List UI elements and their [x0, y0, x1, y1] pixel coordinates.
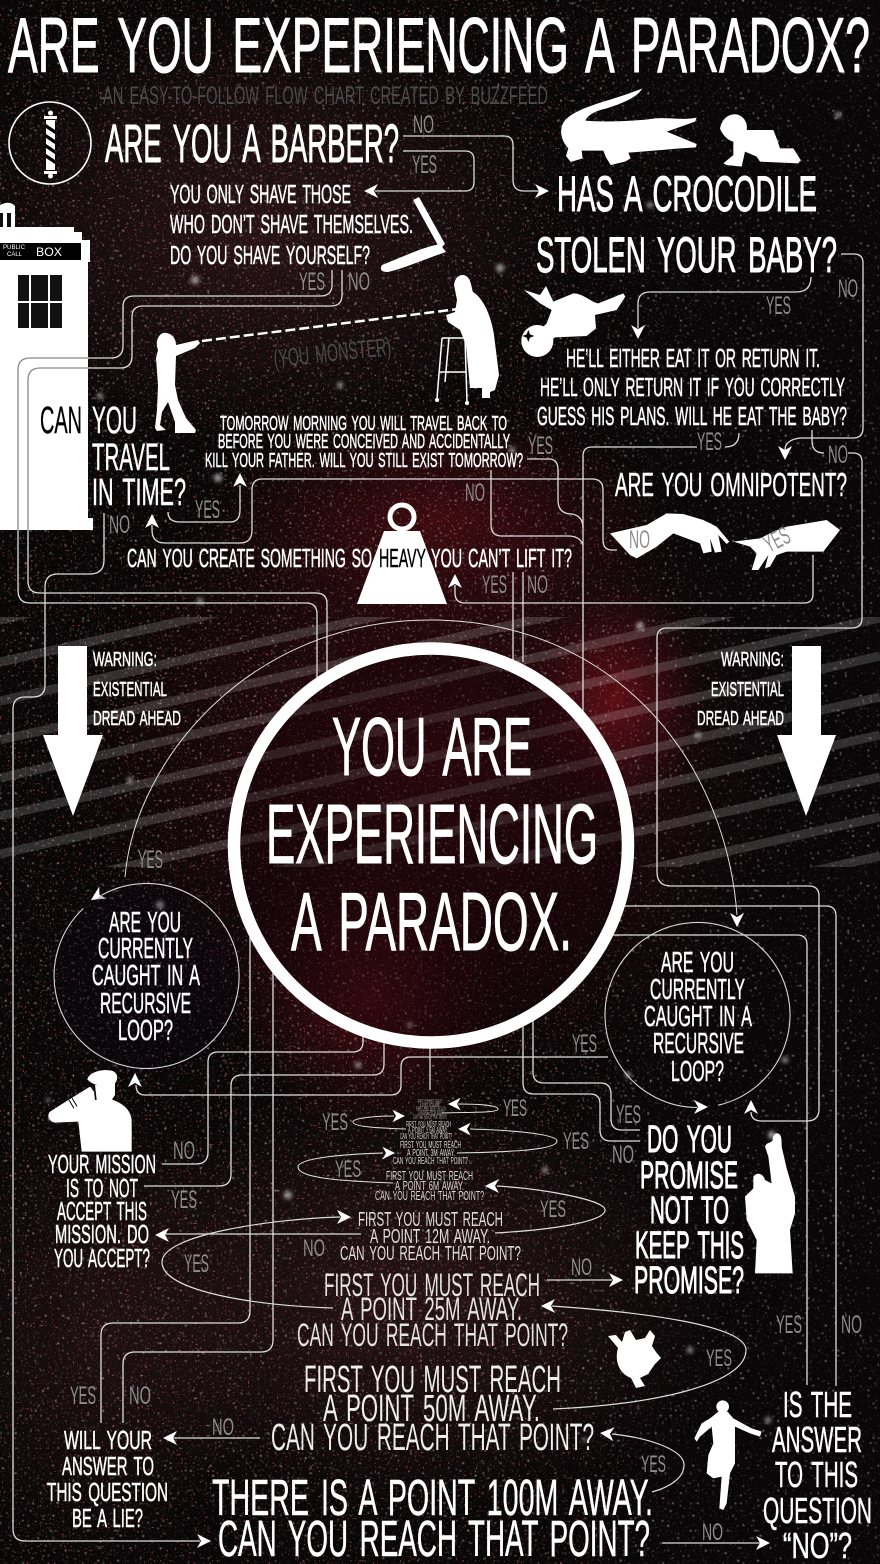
labels: yes and no in the stack: [212, 1095, 732, 1546]
text: recursive loop question: RECURSIVE: [100, 988, 191, 1020]
panel: left recursive loop: [54, 846, 239, 1068]
text: your mission: YOUR MISSION: [48, 1149, 156, 1179]
icon: saluting soldier: [48, 1070, 132, 1152]
text: you travel in time: TRAVEL: [92, 437, 170, 479]
text: YES: [184, 1250, 209, 1278]
text: warning existential dread: WARNING:: [93, 649, 157, 671]
icon: shooter silhouette: [155, 333, 200, 433]
icon: razor: [381, 197, 446, 272]
text: will your answer: [47, 1425, 168, 1533]
text: will your answer: ANSWER TO: [62, 1451, 154, 1481]
text: recursive loop question: [92, 907, 200, 1047]
text: 6m: FIRST YOU MUST REACH: [386, 1168, 473, 1183]
arrowheads: [87, 184, 792, 1550]
text: will your answer: THIS QUESTION: [47, 1477, 168, 1507]
text: recursive loop question: CAUGHT IN A: [92, 960, 200, 992]
text: you travel in time: IN TIME?: [92, 472, 186, 514]
TARDIS police box: BOX: [36, 245, 62, 259]
panel: heavy object question: YES: [482, 571, 507, 599]
text: 12m: CAN YOU REACH THAT POINT?: [340, 1243, 521, 1265]
text: warning existential dread: [697, 649, 784, 730]
labels: yes and no in the stack: YES: [706, 1345, 732, 1372]
panel: right recursive loop: YES: [572, 1030, 597, 1058]
text: your mission: ACCEPT THIS: [57, 1196, 147, 1226]
text: 50m: FIRST YOU MUST REACH: [304, 1359, 561, 1401]
text: eat or return: [537, 343, 847, 431]
label: yes: YES: [70, 1382, 96, 1410]
text: recursive loop question: ARE YOU: [109, 907, 181, 939]
text: your mission: YOU ACCEPT?: [54, 1243, 150, 1273]
text: tiny recursion 1: [413, 1099, 447, 1121]
text: recursive loop question: LOOP?: [671, 1056, 724, 1088]
text: YES: [195, 496, 220, 524]
text: recursive loop question: CURRENTLY: [98, 933, 193, 965]
text: 6m: A POINT 6M AWAY.: [395, 1178, 464, 1193]
panel: omnipotent question: [610, 466, 847, 570]
subtitle: AN EASY-TO-FOLLOW FLOW CHART CREATED BY BUZZFEED: [103, 82, 548, 110]
arrow: right down arrow: [777, 646, 836, 816]
text: tomorrow morning question: BEFORE YOU WERE CONCEIVED AND ACCIDENTALLY: [218, 431, 510, 453]
text: you can't lift it: YOU CAN’T LIFT IT?: [431, 543, 572, 573]
label: no: NO: [465, 479, 485, 507]
icon: hand of god: [733, 520, 840, 570]
text: your mission: MISSION. DO: [55, 1219, 149, 1249]
text: 3m: A POINT 3M AWAY.: [407, 1148, 455, 1159]
icon: turtle: [608, 1330, 661, 1388]
panel: zeno's paradox stack: FIRST YOU MUST REACH: [416, 1107, 446, 1113]
text: 6m: [375, 1168, 484, 1203]
text: 12m: A POINT 12M AWAY.: [370, 1226, 490, 1248]
text: tomorrow morning question: KILL YOUR FATHER. WILL YOU STILL EXIST TOMORROW?: [205, 450, 523, 472]
label: no: NO: [612, 1141, 634, 1169]
text: you monster: (YOU MONSTER): [272, 333, 392, 373]
text: warning existential dread: [93, 649, 181, 730]
text: can you create something so: CAN YOU CREATE SOMETHING SO: [127, 543, 372, 573]
panel: left recursive loop: YES: [138, 846, 163, 874]
text: you travel in time: YOU: [92, 400, 137, 442]
label: no: NO: [348, 268, 370, 296]
label: no: NO: [173, 1137, 195, 1165]
text: recursive loop question: RECURSIVE: [653, 1028, 744, 1060]
text: do you promise: DO YOU: [647, 1119, 732, 1161]
labels: yes and no in the stack: YES: [540, 1196, 566, 1223]
text: your mission: [48, 1149, 156, 1273]
panel: zeno's paradox stack: CAN YOU REACH THAT POINT?: [400, 1132, 452, 1141]
text: 3m: FIRST YOU MUST REACH: [400, 1140, 461, 1151]
text: warning existential dread: DREAD AHEAD: [93, 708, 181, 730]
dashed bullet trajectory: [202, 309, 458, 341]
heading: has a crocodile stolen your baby: [536, 166, 837, 283]
text: 25m: A POINT 25M AWAY.: [341, 1291, 522, 1327]
icon: crocodile: [561, 88, 697, 165]
panel: left warning: [43, 646, 181, 816]
text: 50m: A POINT 50M AWAY.: [323, 1388, 540, 1430]
labels: yes and no in the stack: YES: [641, 1451, 666, 1478]
icon: weight: [357, 505, 447, 604]
text: do you promise: [634, 1119, 744, 1302]
heading: are you a barber: ARE YOU A BARBER?: [105, 114, 399, 174]
panel: crocodile question: [521, 88, 858, 469]
text: heavy (on weight): HEAVY: [379, 543, 426, 573]
text: warning existential dread: EXISTENTIAL: [93, 679, 167, 701]
text: do you promise: PROMISE?: [634, 1260, 744, 1302]
text: 12m: FIRST YOU MUST REACH: [358, 1209, 503, 1231]
labels: yes and no in the stack: NO: [212, 1414, 234, 1441]
labels: yes and no in the stack: YES: [503, 1095, 527, 1122]
text: shave paradox: DO YOU SHAVE YOURSELF?: [170, 240, 370, 270]
text: 25m: FIRST YOU MUST REACH: [324, 1267, 540, 1303]
panel: right warning: [697, 646, 836, 816]
panel: zeno's paradox stack: FIRST YOU MUST REACH: [418, 1099, 442, 1105]
label: yes: YES: [299, 268, 325, 296]
labels: yes and no in the stack: NO: [702, 1519, 723, 1546]
label: no: NO: [413, 111, 434, 139]
panel: central paradox circle: [234, 648, 628, 1042]
text: do you promise: NOT TO: [650, 1190, 729, 1232]
diagonal warning stripes: [0, 617, 880, 867]
label: no: NO: [527, 571, 548, 599]
text: recursive loop question: [644, 947, 752, 1088]
text: do you promise: KEEP THIS: [635, 1225, 744, 1267]
text: 25m: [297, 1267, 568, 1353]
label: no on hand: NO: [629, 526, 650, 554]
panel: promise question: YES: [616, 1101, 641, 1129]
icon: old woman with walker: [435, 275, 499, 405]
label: no: NO: [109, 511, 130, 539]
text: 1.5m: [400, 1120, 452, 1141]
panel: barber question: [9, 102, 446, 296]
text: you are experiencing a paradox: [266, 700, 598, 968]
TARDIS police box: CALL: [7, 251, 22, 258]
panel: zeno's paradox stack: A POINT 75CM AWAY.: [418, 1111, 444, 1117]
panel: promise question: [612, 1101, 795, 1302]
icon: falling baby: [521, 286, 625, 357]
text: shave paradox: YOU ONLY SHAVE THOSE: [170, 179, 351, 209]
text: 100m: [212, 1469, 653, 1564]
text: tiny recursion 1: A POINT 38CM AWAY.: [420, 1103, 440, 1109]
text: your mission: IS TO NOT: [66, 1173, 138, 1203]
TARDIS police box: [0, 203, 93, 530]
panel: barber question: YES: [412, 151, 437, 179]
text: shave paradox: [170, 179, 413, 270]
panel: heavy object question: [127, 505, 572, 604]
text: can (on tardis): CAN: [40, 400, 82, 442]
icon: crossed fingers: [745, 1133, 795, 1273]
text: you are experiencing a paradox: YOU ARE: [332, 700, 532, 793]
icon: barber pole: [9, 102, 91, 184]
text: warning existential dread: EXISTENTIAL: [711, 679, 784, 701]
labels: yes and no in the stack: YES: [563, 1128, 589, 1155]
text: will your answer: BE A LIE?: [72, 1503, 143, 1533]
label: yes: YES: [776, 1311, 802, 1339]
arrow: left down arrow: [43, 646, 103, 816]
labels: yes and no in the stack: YES: [335, 1156, 361, 1183]
icon: crawling baby: [720, 114, 801, 167]
icon: hand of adam: [610, 513, 729, 558]
text: tomorrow morning question: TOMORROW MORNING YOU WILL TRAVEL BACK TO: [220, 413, 507, 435]
text: YES: [528, 432, 553, 460]
text: recursive loop question: ARE YOU: [661, 947, 734, 979]
labels: yes and no in the stack: NO: [571, 1254, 592, 1281]
label: no: NO: [838, 275, 858, 303]
panel: will your answer be a lie: [47, 1382, 168, 1533]
text: you travel in time: [92, 400, 186, 514]
panel: crocodile question: YES: [697, 428, 722, 456]
panel: zeno's paradox stack: FIRST YOU MUST REACH: [406, 1120, 451, 1129]
panel: can you travel in time: [40, 400, 220, 539]
text: 6m: CAN YOU REACH THAT POINT?: [375, 1188, 484, 1203]
icon: running man: [694, 1400, 762, 1510]
panel: zeno's paradox stack: [212, 1095, 762, 1564]
text: 50m: CAN YOU REACH THAT POINT?: [271, 1417, 594, 1459]
panel: crocodile question: YES: [766, 292, 791, 320]
text: shave paradox: WHO DON’T SHAVE THEMSELVES.: [170, 209, 413, 239]
panel: right recursive loop: [572, 923, 790, 1108]
panel: grandfather paradox: [155, 275, 553, 507]
label: no: NO: [841, 1311, 862, 1339]
text: recursive loop question: CAUGHT IN A: [644, 1001, 752, 1033]
text: 12m: [340, 1209, 521, 1265]
text: will your answer: WILL YOUR: [64, 1425, 152, 1455]
panel: mission question: [48, 1070, 209, 1278]
label: yes on hand: YES: [759, 522, 795, 558]
text: is the answer to this question no: [763, 1384, 872, 1564]
text: 25m: CAN YOU REACH THAT POINT?: [297, 1317, 568, 1353]
text: warning existential dread: WARNING:: [721, 649, 784, 671]
panel: zeno's paradox stack: CAN YOU REACH THAT POINT?: [413, 1115, 447, 1121]
TARDIS overlaid grey connector segments: [18, 358, 88, 530]
text: tomorrow morning question: [205, 413, 523, 472]
text: 50m: [271, 1359, 594, 1459]
label: yes: YES: [171, 1186, 197, 1214]
label: no: NO: [828, 441, 848, 469]
text: recursive loop question: CURRENTLY: [650, 974, 745, 1006]
labels: yes and no in the stack: NO: [303, 1235, 325, 1262]
panel: zeno's paradox stack: CAN YOU REACH THAT POINT?: [393, 1156, 468, 1167]
text: warning existential dread: DREAD AHEAD: [697, 708, 784, 730]
labels: yes and no in the stack: YES: [322, 1109, 348, 1136]
label: no: NO: [129, 1382, 151, 1410]
text: do you promise: PROMISE: [640, 1155, 738, 1197]
text: you are experiencing a paradox: A PARADOX.: [291, 875, 572, 968]
text: recursive loop question: LOOP?: [118, 1015, 173, 1047]
panel: is the answer no: [763, 1311, 872, 1564]
text: 1.5m: A POINT 1.5M AWAY.: [408, 1126, 448, 1135]
TARDIS police box: PUBLIC: [3, 244, 25, 251]
text: 3m: [393, 1140, 468, 1167]
